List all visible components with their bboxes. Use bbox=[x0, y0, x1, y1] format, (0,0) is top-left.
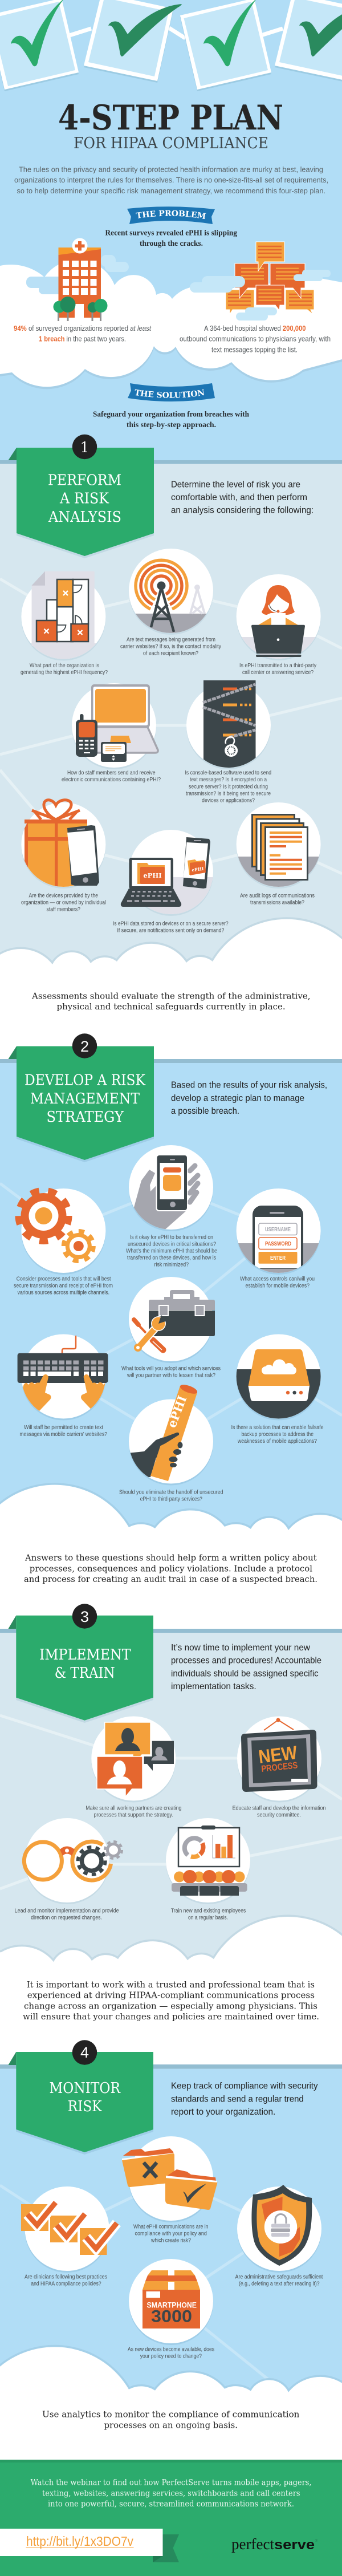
step 1 network lines bbox=[0, 579, 342, 874]
small cloud left bbox=[26, 277, 66, 294]
caption: ePHI to third-party services? bbox=[140, 1496, 202, 1503]
small clouds behind hospital bbox=[101, 255, 141, 305]
logo: perfectserve: ® bbox=[315, 2538, 318, 2543]
caption bbox=[171, 1908, 246, 1921]
caption bbox=[185, 770, 271, 804]
caption: establish for mobile devices? bbox=[245, 1283, 310, 1289]
step 2 takeaway: and process for creating an audit trail in case of a suspected breach. bbox=[24, 1574, 317, 1584]
stat: 200,000 bbox=[180, 324, 331, 354]
caption: direction on requested changes. bbox=[31, 1914, 102, 1921]
item: lead and monitor bbox=[15, 1818, 122, 1921]
step 4 description: standards and send a regular trend bbox=[171, 2094, 304, 2104]
caption bbox=[235, 2274, 323, 2287]
caption bbox=[133, 2224, 209, 2244]
caption: Is console-based software used to send bbox=[185, 770, 271, 776]
icon: smartphone 3000 box bbox=[142, 2270, 200, 2328]
caption bbox=[62, 770, 161, 783]
item: administrative safeguards bbox=[235, 2185, 323, 2287]
title: 4-STEP PLAN bbox=[58, 98, 283, 138]
icon: laptop, phone, pager bbox=[76, 684, 158, 762]
stat: 94 percent: 94% of surveyed organizations reported at least bbox=[14, 324, 151, 332]
stat: 200,000: text messages topping the list. bbox=[211, 346, 298, 354]
item: processes and tools bbox=[14, 1188, 113, 1296]
solution statement bbox=[93, 410, 249, 429]
step 3 heading bbox=[39, 1646, 131, 1682]
footer text: texting, websites, answering services, switchboards and call centers bbox=[42, 2489, 300, 2498]
checkbox 3 bbox=[180, 0, 271, 91]
intro text: so to help determine your specific risk management strategy, we recommend this four-step plan. bbox=[17, 187, 325, 195]
caption: text messages? Is it encrypted on a bbox=[190, 777, 267, 783]
caption bbox=[121, 1366, 221, 1379]
footer text: Watch the webinar to find out how PerfectServe turns mobile apps, pagers, bbox=[31, 2478, 311, 2488]
subtitle: FOR HIPAA COMPLIANCE bbox=[74, 134, 268, 152]
step 4 takeaway: processes on an ongoing basis. bbox=[104, 2420, 238, 2430]
step 2 takeaway bbox=[24, 1553, 317, 1584]
solution statement: Safeguard your organization from breaches with bbox=[93, 410, 249, 419]
icon: laptop and phone with folders: ePHI bbox=[143, 871, 162, 879]
item: device ownership bbox=[21, 800, 106, 913]
number 3: 3 bbox=[80, 1608, 89, 1625]
panel: footer bbox=[0, 2460, 342, 2576]
caption: weaknesses of mobile applications? bbox=[237, 1438, 317, 1445]
step 1 description: Determine the level of risk you are bbox=[171, 480, 300, 489]
icon: broadcast tower bbox=[134, 559, 206, 633]
checklist header illustration bbox=[0, 0, 342, 91]
caption bbox=[240, 1276, 315, 1289]
icon: gift and phone bbox=[25, 800, 99, 891]
caption: of each recipient known? bbox=[143, 650, 198, 656]
step 2 takeaway: processes, consequences and policy violations. Include a protocol bbox=[30, 1563, 312, 1573]
item: failsafe backup bbox=[231, 1334, 325, 1445]
caption bbox=[120, 637, 221, 656]
icon: new process sign bbox=[241, 1718, 317, 1792]
step 1 description: an analysis considering the following: bbox=[171, 506, 314, 516]
item: audit logs bbox=[234, 802, 325, 906]
number 3 bbox=[72, 1604, 97, 1629]
step 4 tag bbox=[8, 2040, 153, 2155]
caption: processes that support the strategy. bbox=[94, 1812, 173, 1818]
item: ePHI storage bbox=[113, 830, 229, 934]
item: new devices bbox=[128, 2259, 214, 2360]
step 3 description: processes and procedures! Accountable bbox=[171, 1656, 321, 1666]
caption bbox=[85, 1805, 181, 1818]
caption: Is ePHI transmitted to a third-party bbox=[239, 663, 316, 669]
caption: Train new and existing employees bbox=[171, 1908, 246, 1914]
number 1: 1 bbox=[80, 439, 89, 456]
step 4 description: Keep track of compliance with security bbox=[171, 2082, 318, 2091]
caption: (e.g., deleting a text after reading it)? bbox=[239, 2281, 320, 2287]
caption: Are the devices provided by the bbox=[28, 893, 98, 899]
number 2 bbox=[72, 1033, 97, 1058]
link ribbon: http://bit.ly/1x3DO7v bbox=[26, 2534, 133, 2549]
link ribbon bbox=[0, 2529, 179, 2562]
item: access controls bbox=[234, 1188, 325, 1289]
icon: gears bbox=[18, 1191, 93, 1261]
caption: secure server? Is it protected during bbox=[189, 784, 268, 790]
checkbox 1 bbox=[0, 0, 79, 91]
footer text bbox=[31, 2478, 311, 2509]
step 1 takeaway: physical and technical safeguards currently in place. bbox=[57, 1001, 286, 1012]
caption: carrier websites? If so, is the contact modality bbox=[120, 643, 221, 650]
item: working partners bbox=[85, 1717, 181, 1818]
step 3 tag bbox=[8, 1604, 153, 1723]
caption: staff members? bbox=[47, 907, 80, 913]
caption: If secure, are notifications sent only on demand? bbox=[117, 927, 225, 934]
caption: on a regular basis. bbox=[188, 1914, 228, 1921]
icon: baton handoff: ePHI bbox=[164, 1394, 189, 1430]
caption: Should you eliminate the handoff of unsecured bbox=[119, 1490, 223, 1496]
caption bbox=[119, 1490, 223, 1503]
item: call center bbox=[234, 574, 325, 676]
banner: the solution bbox=[128, 383, 215, 401]
icon: chained server bbox=[203, 680, 255, 768]
step 2 description bbox=[171, 1081, 327, 1116]
caption: Is ePHI data stored on devices or on a secure server? bbox=[113, 920, 229, 927]
caption bbox=[21, 893, 106, 913]
icon: login phone bbox=[238, 1206, 319, 1273]
caption: What part of the organization is bbox=[30, 663, 99, 669]
icon: folders with x and check bbox=[122, 2148, 218, 2210]
step 3 heading: & TRAIN bbox=[55, 1665, 115, 1682]
caption: Is there a solution that can enable failsafe bbox=[231, 1425, 324, 1431]
banner: the problem bbox=[127, 206, 215, 224]
icon: checked boxes bbox=[21, 2202, 117, 2255]
small clouds in front of bubbles bbox=[190, 270, 331, 321]
caption: What’s the minimum ePHI that should be bbox=[126, 1248, 217, 1255]
step 1 heading: PERFORM bbox=[48, 472, 121, 489]
caption: unsecured devices in critical situations? bbox=[128, 1242, 216, 1248]
item: tools bbox=[121, 1277, 221, 1379]
caption: What access controls can/will you bbox=[240, 1276, 315, 1282]
banner: the problem: THE PROBLEM bbox=[136, 210, 206, 219]
caption: Lead and monitor implementation and provide bbox=[15, 1908, 119, 1914]
item: hand holding phone bbox=[126, 1145, 217, 1268]
step 1 description: comfortable with, and then perform bbox=[171, 493, 307, 502]
caption: call center or answering service? bbox=[242, 670, 314, 676]
banner: the solution: THE SOLUTION bbox=[135, 389, 204, 398]
step 3 network lines bbox=[0, 1715, 342, 1889]
caption: What ePHI communications are in bbox=[133, 2224, 209, 2230]
number 2: 2 bbox=[80, 1038, 89, 1055]
step 3 description: individuals should be assigned specific bbox=[171, 1669, 319, 1678]
icon: presentation with audience bbox=[172, 1825, 247, 1896]
icon: baton handoff bbox=[128, 1383, 198, 1481]
step 3 description: It’s now time to implement your new bbox=[171, 1643, 310, 1653]
icon: cloud backup server bbox=[234, 1349, 325, 1421]
problem statement: through the cracks. bbox=[140, 239, 203, 248]
white cloud closing step 1 bbox=[0, 919, 342, 1059]
caption: backup processes to address the bbox=[242, 1431, 314, 1438]
checkbox 2 bbox=[84, 0, 182, 83]
caption: transmissions available? bbox=[250, 900, 304, 906]
intro text: organizations to interpret the rules for themselves. There is no one-size-fits-all set of requirements, bbox=[14, 176, 328, 184]
item: keyboard typing bbox=[17, 1334, 115, 1438]
icon: new process sign: PROCESS bbox=[261, 1760, 298, 1774]
step 3 takeaway bbox=[23, 1979, 319, 2022]
step 4 description: report to your organization. bbox=[171, 2107, 275, 2117]
white cloud closing step 4 bbox=[0, 2347, 342, 2460]
step 2 heading: MANAGEMENT bbox=[30, 1090, 140, 1108]
caption: messages via mobile carriers’ websites? bbox=[19, 1431, 107, 1438]
caption: various sources across multiple channels. bbox=[18, 1289, 109, 1296]
item: educate staff bbox=[233, 1717, 325, 1818]
step 2 takeaway: Answers to these questions should help form a written policy about bbox=[25, 1553, 317, 1563]
step 3 description: implementation tasks. bbox=[171, 1682, 256, 1691]
stat: 200,000: outbound communications to physicians yearly, with bbox=[180, 335, 331, 343]
step 1 heading: ANALYSIS bbox=[48, 509, 121, 526]
caption bbox=[21, 663, 108, 676]
icon: login phone: PASSWORD bbox=[265, 1241, 291, 1247]
icon: hand and phone bbox=[128, 1155, 198, 1232]
icon: smartphone 3000 box: SMARTPHONE bbox=[147, 2301, 197, 2310]
caption: your policy need to change? bbox=[140, 2354, 202, 2360]
problem statement bbox=[105, 229, 237, 248]
caption: secure transmission and receipt of ePHI from bbox=[14, 1283, 113, 1289]
caption: compliance with your policy and bbox=[135, 2230, 207, 2237]
icon: hands on keyboard bbox=[17, 1336, 108, 1411]
step 1 heading: A RISK bbox=[59, 490, 109, 508]
white cloud shape bbox=[0, 259, 342, 389]
step 4 takeaway: Use analytics to monitor the compliance of communication bbox=[42, 2409, 300, 2420]
caption: will you partner with to lessen that risk? bbox=[127, 1373, 215, 1379]
step 4 heading: MONITOR bbox=[49, 2080, 121, 2097]
caption: Will staff be permitted to create text bbox=[24, 1425, 103, 1431]
step 1 description bbox=[171, 480, 314, 516]
problem statement: Recent surveys revealed ePHI is slipping bbox=[105, 229, 237, 237]
caption: What tools will you adopt and which services bbox=[121, 1366, 221, 1372]
caption: Are administrative safeguards sufficient bbox=[235, 2274, 323, 2281]
step 4 heading bbox=[49, 2080, 121, 2115]
step 3 takeaway: change across an organization — especially among physicians. This bbox=[24, 2001, 317, 2011]
step 3 description bbox=[171, 1643, 321, 1691]
icon: speech bubbles bbox=[226, 242, 314, 314]
caption: which create risk? bbox=[150, 2237, 191, 2244]
step 2 description: a possible breach. bbox=[171, 1106, 239, 1116]
icon: toolbox and wrench bbox=[134, 1290, 215, 1352]
caption: electronic communications containing ePHI? bbox=[62, 777, 161, 783]
icon: agent with laptop bbox=[242, 585, 315, 659]
caption: Is it okay for ePHI to be transferred on bbox=[130, 1235, 213, 1241]
panel: step 2 background bbox=[0, 1059, 342, 1629]
item: best practices bbox=[21, 2186, 117, 2287]
logo: perfectserve: serve bbox=[274, 2537, 315, 2553]
step 3 heading: IMPLEMENT bbox=[39, 1646, 131, 1664]
caption: Consider processes and tools that will best bbox=[17, 1276, 111, 1282]
caption: risk minimized? bbox=[154, 1262, 189, 1268]
item: console-based software bbox=[185, 680, 271, 804]
icon: laptop and phone with folders bbox=[121, 837, 214, 917]
number 4: 4 bbox=[80, 2044, 89, 2061]
item: text message tower bbox=[120, 549, 221, 656]
solution statement: this step-by-step approach. bbox=[127, 420, 216, 429]
caption bbox=[126, 1235, 217, 1268]
panel: step 1 background bbox=[0, 460, 342, 1059]
icon: new process sign: NEW bbox=[257, 1742, 299, 1767]
caption: Make sure all working partners are creating bbox=[85, 1805, 181, 1811]
step 1 heading bbox=[48, 472, 121, 526]
step 1 takeaway: Assessments should evaluate the strength of the administrative, bbox=[31, 991, 310, 1001]
item: third-party handoff bbox=[119, 1383, 223, 1503]
caption: security committee. bbox=[257, 1812, 301, 1818]
logo: perfectserve: perfect bbox=[231, 2536, 274, 2553]
step 1 takeaway bbox=[31, 991, 310, 1012]
stat: 200,000: A 364-bed hospital showed 200,000 bbox=[204, 324, 306, 332]
caption bbox=[19, 1425, 107, 1438]
caption bbox=[233, 1805, 325, 1818]
step 2 description: Based on the results of your risk analysis, bbox=[171, 1081, 327, 1090]
caption: Are clinicians following best practices bbox=[25, 2274, 107, 2281]
step 2 description: develop a strategic plan to manage bbox=[171, 1093, 304, 1103]
caption: As new devices become available, does bbox=[128, 2347, 214, 2353]
step 2 heading: DEVELOP A RISK bbox=[25, 1072, 146, 1089]
caption: Educate staff and develop the information bbox=[233, 1805, 325, 1811]
panel: step 3 background bbox=[0, 1629, 342, 2064]
caption: transmission? Is it being sent to secure bbox=[186, 790, 271, 797]
item: train employees bbox=[166, 1818, 250, 1921]
icon: shield with lock bbox=[251, 2185, 312, 2266]
caption: How do staff members send and receive bbox=[67, 770, 156, 776]
white cloud closing step 3 bbox=[0, 1917, 342, 2067]
step 3 takeaway: will ensure that your changes and policies are maintained over time. bbox=[23, 2011, 319, 2022]
number 4 bbox=[72, 2040, 97, 2065]
caption: Are text messages being generated from bbox=[127, 637, 215, 643]
icon: hospital bbox=[54, 238, 107, 321]
footer text: into one powerful, secure, streamlined communications network. bbox=[48, 2500, 294, 2509]
step 4 heading: RISK bbox=[68, 2098, 102, 2115]
icon: floor plan bbox=[32, 571, 95, 646]
panel: step 4 background bbox=[0, 2064, 342, 2460]
caption: transferred on these devices, and how is bbox=[127, 1255, 216, 1261]
item: organization floor plan bbox=[17, 571, 111, 676]
icon: chat people bbox=[97, 1722, 174, 1797]
step 3 takeaway: It is important to work with a trusted and professional team that is bbox=[27, 1979, 315, 1990]
icon: login phone: ENTER bbox=[270, 1255, 286, 1261]
step 2 tag bbox=[8, 1033, 154, 1162]
caption: and HIPAA compliance policies? bbox=[31, 2281, 101, 2287]
caption bbox=[25, 2274, 107, 2287]
caption bbox=[14, 1276, 113, 1296]
item: compliance folders bbox=[122, 2136, 218, 2244]
caption bbox=[240, 893, 315, 906]
step 2 heading: STRATEGY bbox=[47, 1109, 124, 1126]
step 2 heading bbox=[25, 1072, 146, 1126]
caption: devices or applications? bbox=[202, 797, 255, 804]
icon: stacked documents bbox=[238, 814, 319, 887]
caption bbox=[113, 920, 229, 934]
step 4 description bbox=[171, 2082, 318, 2117]
caption: generating the highest ePHI frequency? bbox=[21, 670, 108, 676]
step 4 network lines bbox=[0, 2179, 279, 2381]
checkbox 4 bbox=[275, 0, 342, 83]
icon: glasses with gears bbox=[24, 1841, 122, 1880]
step 1 tag bbox=[8, 435, 154, 558]
step 3 takeaway: experienced at driving HIPAA-compliant communications process bbox=[27, 1990, 315, 2001]
number 1 bbox=[72, 435, 97, 459]
step 2 network lines bbox=[0, 1183, 342, 1441]
caption bbox=[231, 1425, 324, 1445]
panel: sky header background bbox=[0, 0, 342, 460]
caption: Are audit logs of communications bbox=[240, 893, 315, 899]
stat: 94 percent: 1 breach in the past two years. bbox=[39, 335, 126, 343]
item: staff devices bbox=[62, 683, 161, 783]
intro text: The rules on the privacy and security of protected health information are murky at best, leaving bbox=[19, 165, 323, 173]
caption bbox=[15, 1908, 119, 1921]
intro text bbox=[14, 165, 328, 195]
step 4 takeaway bbox=[42, 2409, 300, 2430]
stat: 94 percent bbox=[14, 324, 151, 343]
logo: perfectserve bbox=[231, 2536, 318, 2553]
icon: laptop and phone with folders: ePHI bbox=[192, 866, 204, 873]
caption: organization — or owned by individual bbox=[21, 900, 106, 906]
icon: login phone: USERNAME bbox=[265, 1227, 291, 1233]
title: 4-STEP PLAN bbox=[58, 99, 283, 139]
white cloud closing step 2 bbox=[0, 1485, 342, 1629]
caption bbox=[128, 2347, 214, 2360]
icon: smartphone 3000 box: 3000 bbox=[151, 2307, 192, 2326]
caption bbox=[239, 663, 316, 676]
